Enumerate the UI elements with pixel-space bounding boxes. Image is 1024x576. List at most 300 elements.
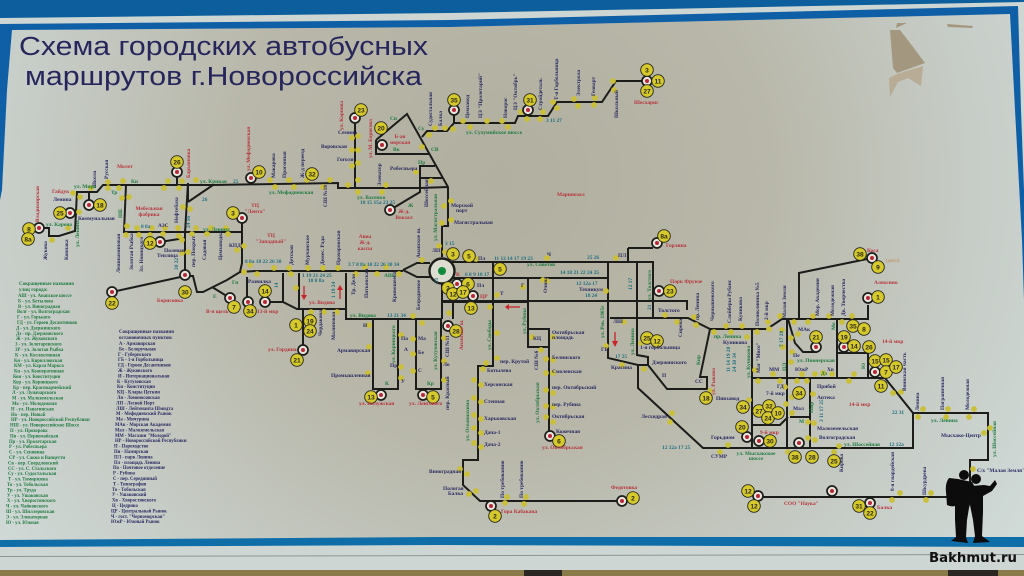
legend: stop abbreviations: Ч - гост. "Черноморская" [111, 515, 165, 520]
stop names: blue labels: Кожечная [556, 429, 580, 435]
bus stops: yellow dots [49, 78, 993, 507]
stop names: blue labels: С/х "Малая Земля" [977, 468, 1024, 474]
legend: street abbreviations: М - ул. Малоземельская [12, 397, 64, 402]
stop names: blue labels: Сирена [678, 319, 684, 337]
stop names: blue labels: Па [401, 336, 408, 342]
route number badges: 3 [645, 67, 649, 74]
stop names: blue labels: Пл [477, 283, 484, 289]
legend: street abbreviations: Дз - пр. Дзержинского [16, 332, 64, 337]
route numbers: teal labels: 11 12 14 17 19 23 [494, 256, 533, 262]
legend: stop abbreviations: Ма - Мичурина [116, 418, 150, 423]
route number badges: 15 [871, 358, 879, 365]
stop names: blue labels: Красина [611, 365, 632, 371]
stop names: blue labels: Виноградная [429, 469, 461, 475]
legend: street abbreviations: СР - ул. Сакко и Ванцетти [9, 456, 65, 461]
stop names: blue labels: Пологая [443, 486, 464, 492]
route numbers: teal labels: 8 8а 18 22 26 30 [245, 259, 282, 265]
legend: stop abbreviations: ММ - Магазин "Молодой" [115, 434, 172, 439]
stop names: blue labels: Коммунальная [78, 216, 115, 222]
route number badges: 11 [878, 383, 885, 390]
route number badges: 2 [631, 495, 635, 502]
watermark icon: two hikers silhouette [946, 470, 997, 543]
street names: green labels: ул. Васенко [357, 195, 386, 201]
place names: red labels: "Западный" [256, 238, 286, 245]
stop names: blue labels: Дзержинского [652, 360, 687, 366]
stop names: blue labels: Прибой [817, 383, 836, 390]
route number badges: 12 [653, 338, 661, 345]
title [19, 33, 428, 91]
place names: red labels: 14-й мкр [849, 401, 870, 408]
place names: red labels: ул. Калужская [359, 401, 394, 407]
stop names: blue labels: КЦ [533, 336, 542, 342]
place names: red labels: Вокзал [395, 215, 413, 221]
street names: green labels: ул. Шоссейная [991, 421, 998, 457]
stop names: blue labels: КПД [229, 243, 241, 249]
stop names: blue labels: Хв [827, 367, 834, 373]
place names: red labels: Ж-д. [359, 240, 371, 246]
stop names: blue labels: Ло [443, 362, 450, 368]
route number badges: 3 [231, 210, 235, 217]
stop names: blue labels: Ленина [53, 197, 72, 203]
stop names: blue labels: Прогонная [282, 151, 288, 178]
route number badges: 1 [876, 294, 880, 301]
place names: red labels: Гора Кабакана [501, 508, 537, 515]
street names: green labels: ул. Ленина [630, 328, 636, 355]
route numbers: teal labels: 30 22 [174, 258, 180, 270]
street names: green labels: ул. Рев. 1905г [600, 305, 606, 338]
route number badges: 5 [467, 253, 471, 260]
place names: red labels: (авто) [886, 257, 900, 264]
legend: street abbreviations: Мо - ул. Молодежная [12, 402, 57, 407]
stop names: blue labels: Ма [418, 336, 426, 342]
street names: green labels [46, 116, 998, 462]
stop names: blue labels: Куникова [723, 340, 747, 346]
place names: red labels: ул. М. Борисова [368, 119, 374, 158]
stop names: blue labels: ЦЭ "Октябрь" [512, 73, 519, 110]
legend: street abbreviations: Т - ул. Тимирязева [8, 478, 48, 483]
route numbers: teal labels: 12 12а 17 [576, 281, 598, 287]
route number badges: 35 [849, 323, 857, 330]
stop names: blue labels: Молодежная [830, 285, 836, 316]
stop names: blue labels: Стройдеталь [537, 78, 544, 110]
place names: red labels: ул. Карпова [339, 101, 345, 130]
stop names: blue labels: Русская [104, 160, 110, 179]
route number badges: 27 [643, 88, 651, 95]
stop names: blue labels: Ленина [915, 392, 921, 411]
stop names: blue labels: Морской [451, 202, 473, 209]
stop names: blue labels: Молодежная [965, 379, 971, 410]
route number badges: 24 [306, 328, 314, 335]
route numbers: teal labels: 18 8 8а [308, 278, 324, 284]
watermark text: Bakhmut.ru [929, 550, 1017, 566]
stop names: blue labels: Херсонская [484, 382, 513, 388]
stop names: blue labels: Малая Земля [782, 285, 788, 318]
legend: street abbreviations: Но - пер. Новый [11, 413, 46, 418]
stop names: blue labels: АЗС [158, 223, 169, 229]
route number badges: 11 [655, 78, 662, 85]
street names: green labels: Тр [111, 190, 117, 196]
legend: street abbreviations: Ж - ул. Жуковского [16, 337, 58, 342]
stop names: blue labels: СШ №6 [534, 350, 540, 370]
legend: street abbreviations: Л - ул. Луначарского [12, 391, 57, 396]
stop names: blue labels: ЛШ [613, 319, 623, 325]
route numbers: teal labels: 22 31 [892, 410, 904, 416]
stop names: blue labels: 2-й мкр [763, 301, 770, 320]
stop names: blue labels: Белинского [552, 355, 581, 361]
route number badges: 25 [830, 458, 838, 465]
place names: red labels: Б-ая [395, 134, 406, 140]
route number badges: 10 [255, 169, 263, 176]
place names: red labels: СОО "Наука" [784, 501, 819, 507]
stop names: blue labels: Пятковская [364, 269, 370, 298]
route numbers: teal labels: 25 [233, 179, 239, 185]
route number badges: 35 [450, 97, 458, 104]
legend: street abbreviations: С - ул. Сенявина [9, 451, 45, 456]
stop names: blue labels: Садовая [202, 240, 208, 260]
route numbers: teal labels: 1 19 24 [331, 282, 337, 298]
stop names: blue labels: Зл. Новицкого [139, 237, 145, 272]
stop names: blue labels: А [404, 347, 408, 353]
route numbers: teal labels: 13 21 34 [387, 313, 406, 319]
street names: green labels: Ю [861, 363, 867, 369]
legend: stop abbreviations: Мал - Малоземельская [115, 428, 165, 433]
route number badges: 32 [308, 171, 316, 178]
place names: red labels: Алексино [874, 280, 898, 286]
bottom ground strip [0, 570, 1024, 576]
legend: street abbreviations: Ч - ул. Чайковского [6, 505, 49, 510]
bottom blue strip [0, 537, 1024, 547]
route numbers: teal labels: 24 30 34 [732, 353, 738, 372]
route number badges: 8а [660, 233, 668, 240]
stop names: blue labels: пер. Рубина [552, 401, 581, 408]
street names: green labels: ул. Магистральная [433, 194, 439, 241]
street names: green labels: шоссе [749, 456, 764, 462]
route number badges: 31 [526, 97, 534, 104]
route number badges: 23 [666, 288, 674, 295]
legend: street abbreviations: Х - ул. Хворостянского [7, 499, 56, 504]
place names: red labels: Барьяновка [186, 148, 192, 178]
legend: street abbreviations: Г - ул. Горького [17, 316, 51, 321]
street names: green labels: ул. Свободы [486, 319, 493, 350]
stop names: blue labels: Чернышевского [710, 281, 716, 321]
legend: stop abbreviations: остановочных пунктов: [119, 336, 173, 341]
legend: street abbreviations: В - ул. Виноградная [18, 305, 61, 310]
street names: green labels: ул. Октябрьская [534, 382, 541, 423]
route number badges: 7 [232, 304, 236, 311]
stop names: blue labels: Тр. Дело [351, 274, 357, 295]
stop names: blue labels: Г [521, 283, 525, 289]
stop names: blue labels [43, 58, 1024, 498]
route number badges: 17 [459, 289, 467, 296]
street names: green labels: ул. Мысхакское [737, 451, 776, 457]
legend: street abbreviations: Тр - ул. Труда [7, 488, 37, 493]
route numbers: teal labels: 12 12а [889, 442, 904, 448]
route number badges: 27 [755, 408, 763, 415]
street names: green labels: Су [418, 126, 425, 132]
route numbers: teal labels: 24 16 [186, 216, 192, 228]
route number badges: 18 [702, 395, 710, 402]
legend: stop abbreviations: ЦР - Центральный Рынок [111, 509, 167, 514]
legend: street abbreviations: ГД - ул. Героев Десантников [17, 321, 78, 326]
route number badges: 22 [866, 510, 874, 517]
route number badges: 20 [377, 125, 385, 132]
stop names: blue labels: Развилка [248, 279, 271, 285]
legend: street abbreviations: Кон - ул. Конституции [13, 375, 61, 380]
place names: red labels: ул. Рыкова [711, 368, 717, 395]
route number badges: 2 [493, 513, 497, 520]
route numbers: teal labels: 26 [202, 197, 208, 203]
route numbers: teal labels: 3 15 [445, 241, 455, 247]
place names: red labels: Маринозал [557, 192, 585, 198]
route number badges: 8 [862, 326, 866, 333]
stop names: blue labels: Геоварт [591, 76, 597, 96]
legend: stop abbreviations: П - Пароходство [114, 445, 149, 450]
street names: green labels: М [799, 419, 804, 425]
legend: stop abbreviations: А - Армавирская [119, 342, 156, 347]
route number badges: 6 [557, 438, 561, 445]
stop names: blue labels: Гоголя [337, 157, 354, 163]
legend: stop abbreviations [111, 330, 187, 525]
place names: red labels: 9-й мкр [760, 429, 779, 436]
legend: street abbreviations: Су - ул. Судостальская [8, 472, 57, 477]
route number badges: 5 [498, 266, 502, 273]
stop names: blue labels: Аптека [817, 395, 835, 401]
stop names: blue labels: Кирова [839, 454, 845, 472]
legend: stop abbreviations: Ж - Жуковского [118, 369, 153, 374]
street names: green labels: Е [213, 294, 217, 300]
route numbers: teal labels: 18 24 [585, 293, 597, 299]
stop names: blue labels: СШ №18 [323, 185, 329, 207]
stop names: blue labels: Воровская [321, 144, 347, 150]
route number badges: 25 [56, 210, 64, 217]
route number badges: 13 [467, 305, 475, 312]
stop names: blue labels: Смоленская [552, 369, 582, 375]
place names: red labels: Мебельная [135, 205, 163, 212]
route number badges: 38 [856, 251, 864, 258]
stop names: blue labels: 7-й мкр [766, 390, 785, 397]
legend: stop abbreviations: У - Ушаковский [112, 493, 147, 498]
stop names: blue labels: СУМР [711, 454, 728, 460]
legend: street abbreviations: П - ул. Прохорова [10, 429, 48, 434]
legend: stop abbreviations: КЦ - Клары Цеткин [117, 391, 160, 396]
legend: street abbreviations: У - ул. Ушаковская [7, 494, 48, 499]
legend: stop abbreviations: МАк - Морская Академия [115, 423, 171, 428]
street names: green labels: Сн [390, 116, 397, 122]
street names: green labels: Кр [427, 381, 434, 387]
route number badges: 3 [451, 251, 455, 258]
route number badges: 28 [452, 328, 460, 335]
route numbers: teal labels: 10 15 15а 23 25 [360, 200, 395, 206]
route numbers: teal labels: 1 19 21 24 25 [302, 273, 332, 279]
stop names: blue labels: Мурчанское [305, 234, 311, 265]
legend: street abbreviations: Волг - ул. Волгоградская [17, 310, 70, 315]
street names: green labels: СВ [431, 147, 439, 153]
place names: red labels: 14-й мкр [882, 338, 903, 345]
street names: green labels: ул. Карена [46, 222, 72, 228]
stop names: blue labels: пер. Октябрьский [552, 384, 596, 391]
street names: green labels: Пр [418, 160, 425, 166]
street names: green labels: ул. Ленина [931, 418, 958, 424]
street names: green labels: ул. Рубина [521, 308, 528, 334]
stop names: blue labels: Теплица [157, 253, 178, 259]
place names: red labels: морская [390, 140, 410, 146]
stop names: blue labels: СС [695, 379, 703, 385]
stop names: blue labels: Армавирская [337, 348, 370, 354]
route number badges: 12 [750, 503, 758, 510]
route number badges: 15 [882, 357, 890, 364]
route number badges: 21 [293, 357, 301, 364]
legend: street abbreviations: улиц города: [19, 288, 48, 293]
route numbers: teal labels: 3 7 8 8а 18 22 26 30 34 [348, 262, 400, 268]
legend: street abbreviations: Ш - ул. Шиллеровская [6, 510, 55, 515]
route number badges: 30 [766, 438, 774, 445]
legend: stop abbreviations: ЛШ - Лейтенанта Шмидта [116, 407, 174, 412]
place names: red labels: Ж-д. [398, 209, 410, 215]
street names: green labels: Кир [696, 355, 702, 365]
red direction arrows [301, 285, 618, 347]
route terminals [34, 76, 880, 511]
stop names: blue labels: Лесхидрая [641, 414, 667, 420]
route number badges: 34 [739, 404, 747, 411]
route numbers: teal labels: 17 25 [615, 354, 627, 360]
place names: red labels: Авиа [359, 234, 372, 240]
street names: green labels: Вк [393, 147, 401, 153]
stop names: blue labels: Ковпака [64, 239, 70, 260]
route number badges: 20 [738, 424, 746, 431]
stop names: blue labels: Прохоровская [336, 230, 342, 265]
street names: green labels: АШ [384, 273, 394, 279]
stop names: blue labels: СШ №11 [445, 335, 451, 357]
stop names: blue labels: пер. Крутой [500, 358, 529, 365]
route numbers: teal labels: 3 11 27 [546, 118, 562, 124]
legend: stop abbreviations: И - Интернациональная [118, 374, 170, 379]
stop names: blue labels: Пивзавод [716, 396, 739, 402]
street names: green labels: ул. Мефодиевская [269, 189, 313, 196]
legend: stop abbreviations: Пл - площадь Ленина [114, 461, 161, 466]
place names: red labels: Молет [117, 164, 133, 170]
place names: red labels: ЦР [480, 294, 488, 300]
legend: stop abbreviations: Бе - Белоручьная [119, 347, 156, 352]
stop names: blue labels: С [418, 368, 422, 374]
legend: street abbreviations: К - ул. Коллективная [15, 353, 61, 358]
legend: street abbreviations: КМ - ул. Карла Маркса [14, 364, 64, 369]
place names: red labels: ТЦ [251, 203, 260, 209]
central hub circle [430, 258, 454, 284]
stop names: blue labels: 1-я горбольница [640, 344, 680, 351]
route number badges: 25 [643, 335, 651, 342]
legend: stop abbreviations: Г - Губернского [118, 353, 152, 358]
legend: stop abbreviations: Кн - Конституции [117, 385, 155, 390]
legend: street abbreviations: АШ - ул. Анапское шоссе [18, 294, 72, 299]
stop names: blue labels: Поликлиника №5 [755, 282, 761, 326]
route numbers: teal labels [141, 118, 904, 451]
stop names: blue labels: По требованию [518, 461, 525, 498]
stop names: blue labels: Элеватор [377, 163, 383, 186]
stop names: blue labels: Маг "Мясо" [756, 342, 762, 373]
stop names: blue labels: Шоссейная [423, 179, 430, 207]
street names: green labels: Дз [821, 371, 828, 377]
blue top edge band [0, 0, 1024, 18]
route number badges: 19 [306, 318, 314, 325]
stop names: blue labels: П [662, 373, 667, 379]
route number badges: 31 [855, 503, 863, 510]
route number badges [22, 64, 902, 522]
street names: green labels: Нюр [809, 402, 815, 413]
street names: green labels: ул. Шоссейная [844, 441, 880, 448]
stop names: blue labels: Дача-2 [484, 442, 501, 448]
stop names: blue labels: Октябрьская [552, 413, 584, 420]
legend: street abbreviations: Пр - ул. Пролетарская [9, 440, 57, 445]
legend: stop abbreviations: К - Кутузовская [117, 380, 151, 385]
stop names: blue labels: Пл [478, 256, 485, 262]
street names: green labels: ул. Толстого [647, 270, 653, 300]
legend: street abbreviations: Р - ул. Робеспьера [9, 445, 47, 450]
street names: green labels: ШЕ [118, 208, 124, 218]
stop names: blue labels: Ч [547, 252, 551, 258]
legend: street abbreviations: Ю - ул. Южная [6, 521, 39, 526]
stop names: blue labels: Балка [438, 111, 444, 126]
stop names: blue labels: Мал [793, 406, 804, 412]
place names: red labels: ул. Видова [309, 300, 335, 306]
route number badges: 32 [765, 403, 773, 410]
stop names: blue labels: Волгоградская [819, 435, 855, 441]
stop names: blue labels: ЦЭ "Пролетарий" [477, 73, 484, 118]
legend: street abbreviations: СС - ул. С. Стальского [8, 467, 57, 472]
stop names: blue labels: У [401, 379, 405, 385]
stop names: blue labels: Шкурдрева [922, 466, 928, 495]
route number badges: 7 [884, 369, 888, 376]
stop names: blue labels: Детская [289, 245, 295, 265]
street names: green labels: ул. Видова [350, 313, 376, 319]
legend: stop abbreviations: Пн - Памирская [114, 450, 149, 455]
route numbers: teal labels: 14 18 21 22 24 25 [560, 270, 599, 276]
legend: street abbreviations: НР - ул. Новороссийской Республики [11, 418, 90, 423]
legend: street abbreviations: Сокращенные названия [19, 282, 74, 287]
street names: green labels: ул. Сухумийское шоссе [466, 129, 523, 136]
route number badges: 19 [840, 334, 848, 341]
stop names: blue labels: Очина [543, 277, 549, 293]
place names: red labels: ул. Мефодиевская [245, 127, 252, 171]
stop names: blue labels: Т [500, 291, 504, 297]
route number badges: 6 [466, 281, 470, 288]
route number badges: 8 [27, 226, 31, 233]
street names: green labels: ул. Ленина [75, 220, 81, 247]
stop names: blue labels: Золотая Рыбка [128, 233, 135, 270]
stop names: blue labels: пр. Ленина [695, 293, 701, 320]
stop names: blue labels: Судостальная [428, 92, 434, 126]
title: Схема городских автобусных [19, 33, 428, 61]
route number badges: 13 [367, 394, 375, 401]
route number badges: 12 [146, 240, 154, 247]
place names: red labels: Владимирская [35, 186, 41, 222]
stop names: blue labels: 8-я гвардейская [889, 452, 896, 491]
route number badges: 23 [357, 107, 365, 114]
bus route network lines [39, 81, 988, 503]
place names: red labels: "Лента" [245, 209, 265, 215]
legend: stop abbreviations: НР - Новороссийской Республики [115, 439, 187, 444]
stop names: blue labels: Мор. Академия [815, 278, 821, 316]
stop names: blue labels: Демес. Рада [320, 236, 326, 265]
route number badges: 30 [181, 289, 189, 296]
stop names: blue labels: Т-я Горбольница [553, 58, 560, 100]
legend: street abbreviations: Кр - пер. Красноармейский [13, 386, 71, 391]
street names: green labels: Ж [408, 203, 414, 209]
legend: stop abbreviations: М - Мефодиевский Рынок [116, 412, 172, 417]
stop names: blue labels: Пр [390, 363, 397, 369]
stop names: blue labels: Новорос [503, 97, 509, 118]
place names: red labels: Парк Фрунзе [670, 279, 703, 285]
stop names: blue labels: Жукова [43, 241, 49, 260]
